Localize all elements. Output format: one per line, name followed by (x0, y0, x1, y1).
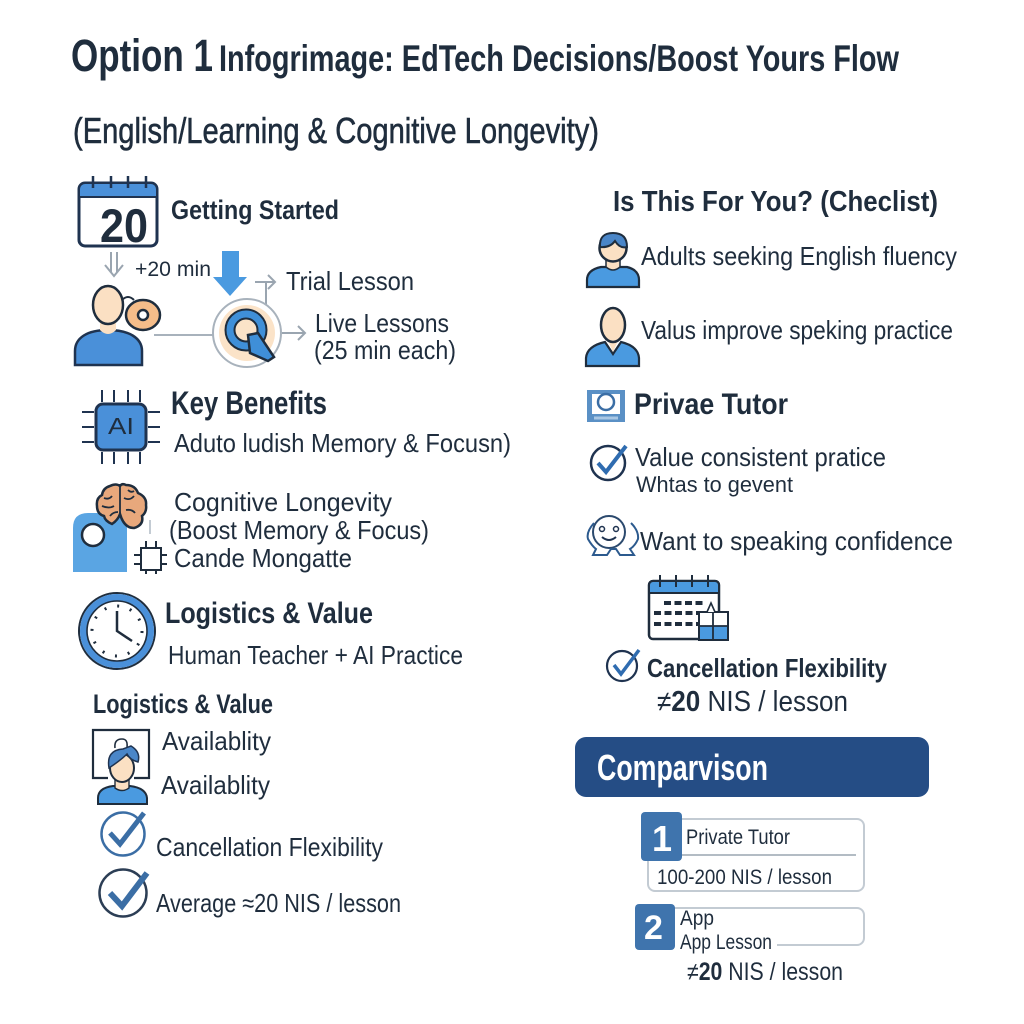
label: 25 min each: (25 min each) (314, 335, 456, 365)
icon: profile frame (93, 730, 149, 804)
icon: check 2 (100, 870, 147, 916)
heading: checklist: Is This For You? (Checlist) (613, 186, 938, 218)
icon: tutor frame (587, 390, 625, 422)
card: private tutor (641, 812, 864, 891)
icon: person 2 (586, 308, 639, 366)
text: memory and focus: Aduto ludish Memory & Focusn) (174, 428, 511, 458)
connector line (154, 334, 213, 336)
icon: person (75, 286, 160, 365)
icon: calendar grid (649, 575, 728, 640)
heading: logistics: Logistics & Value (93, 689, 273, 719)
card: private tutor: 100-200 NIS / lesson (657, 866, 832, 889)
text: app price: ≠20 NIS / lesson (687, 958, 843, 986)
text: whtas to gevent: Whtas to gevent (636, 472, 793, 497)
icon: search circle (213, 299, 281, 367)
text: human teacher: Human Teacher + AI Practice (168, 640, 463, 670)
heading: key benefits: Key Benefits (171, 385, 327, 421)
icon: check flexibility (607, 650, 639, 681)
heading: logistics and value: Logistics & Value (165, 597, 373, 630)
panel: cognitive longevity (73, 484, 429, 574)
banner: comparison (575, 737, 929, 797)
icon: person 1 (587, 233, 639, 287)
icon: AI chip: AI (108, 413, 134, 439)
arrow: down blue (213, 251, 247, 296)
icon: check (591, 446, 626, 480)
text: consistent practice: Value consistent pratice (635, 442, 886, 472)
panel: checklist (586, 186, 957, 718)
icon: clock (79, 593, 155, 669)
panel: key benefits (82, 385, 511, 464)
card: private tutor: Private Tutor (686, 826, 790, 849)
card: app: App Lesson (680, 931, 772, 954)
label: plus 20 min: +20 min (135, 258, 211, 281)
text: cognitive longevity: Cognitive Longevity (174, 487, 392, 517)
arrow: to live lessons (282, 326, 305, 340)
text: cancellation: Cancellation Flexibility (156, 832, 383, 862)
label: trial lesson: Trial Lesson (286, 266, 414, 296)
title: Option 1 (71, 30, 213, 81)
text: adults: Adults seeking English fluency (641, 241, 957, 271)
text: availability 2: Availablity (161, 770, 270, 800)
heading: getting started: Getting Started (171, 195, 339, 225)
label: live lessons: Live Lessons (315, 308, 449, 338)
card: app: 2 (644, 909, 663, 947)
text: average: Average ≈20 NIS / lesson (156, 888, 401, 918)
text: price: ≠20 NIS / lesson (657, 686, 848, 718)
card: app: App (680, 907, 714, 930)
panel: comparison (575, 737, 929, 986)
icon: calendar 20: 20 (100, 199, 148, 252)
text: availability 1: Availablity (162, 726, 271, 756)
panel: logistics and value clock (79, 593, 463, 670)
title (71, 30, 899, 81)
panel: getting started (75, 176, 456, 367)
arrow: down grey (105, 252, 123, 276)
heading: private tutor: Privae Tutor (634, 388, 788, 421)
icon: AI chip (82, 390, 160, 464)
icon: smile (588, 516, 638, 555)
card: app (635, 904, 864, 954)
text: confidence: Want to speaking confidence (640, 526, 953, 556)
text: boost memory: (Boost Memory & Focus) (169, 515, 429, 545)
icon: calendar 20 (79, 176, 157, 252)
text: cande mongatte: Cande Mongatte (174, 543, 352, 573)
subtitle: (English/Learning & Cognitive Longevity) (73, 110, 599, 151)
banner: comparison: Comparvison (597, 747, 768, 788)
panel: logistics list (93, 689, 401, 918)
text: cancellation flexibility: Cancellation Flexibility (647, 653, 887, 683)
icon: check 1 (102, 812, 144, 856)
card: private tutor: 1 (652, 818, 672, 859)
text: speaking practice: Valus improve speking practice (641, 315, 953, 345)
arrow: to trial lesson (255, 275, 275, 305)
icon: brain, head and chip (73, 484, 167, 574)
